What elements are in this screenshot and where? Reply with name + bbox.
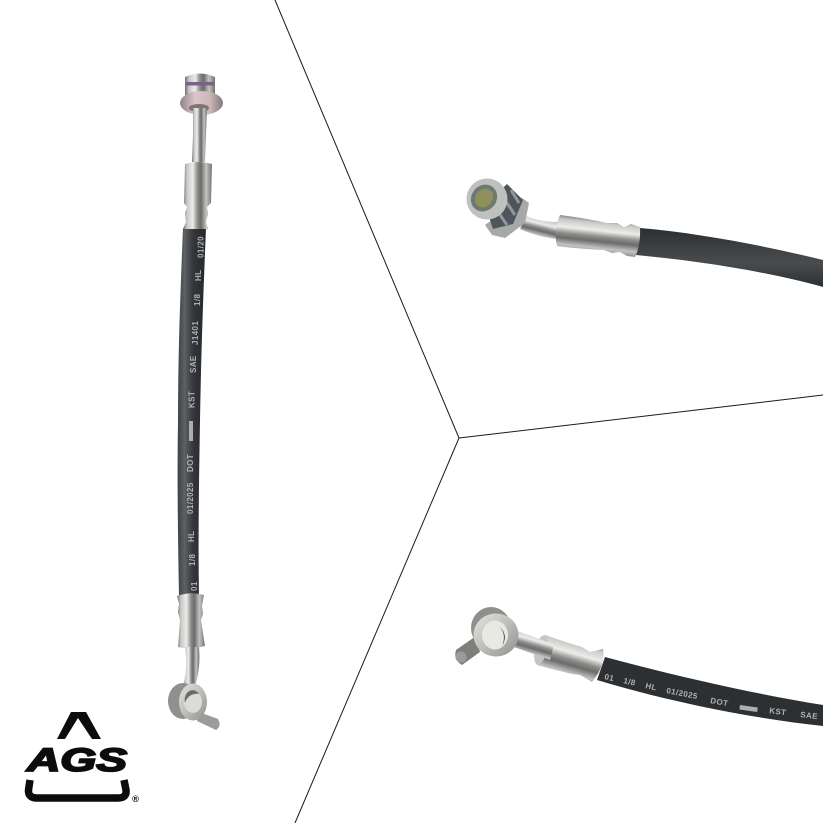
hose printed markings: KST	[769, 706, 787, 717]
bottom bent tube	[183, 647, 199, 689]
banjo eye	[471, 607, 518, 656]
bottom-right view: banjo end close-up with markings	[455, 607, 823, 726]
logo wordmark: AGS	[26, 742, 128, 778]
hose printed markings: DOT	[186, 454, 195, 472]
hose printed markings: 01/2025	[186, 482, 195, 514]
straight tube	[514, 631, 554, 660]
hose printed markings: 01	[604, 672, 615, 683]
hose printed markings: 1/8	[188, 554, 197, 566]
bottom crimp ferrule	[177, 593, 205, 648]
hose body	[178, 228, 206, 597]
hose printed markings: 01/2025	[666, 686, 699, 701]
hose printed markings	[604, 672, 819, 721]
hose printed markings: SAE	[800, 710, 819, 721]
crimp ferrule	[537, 635, 604, 682]
hose printed markings: 01/20	[196, 236, 206, 258]
threaded nut	[465, 178, 529, 238]
hose printed markings: 1/8	[193, 294, 202, 306]
bent tube	[520, 216, 560, 239]
AGS logo	[26, 712, 139, 805]
hose printed markings: SAE	[189, 355, 198, 373]
hose printed markings: J1401	[191, 321, 200, 345]
top banjo bolt fitting	[180, 74, 223, 162]
logo bottom bracket	[28, 780, 126, 798]
bottom stub pin	[197, 712, 220, 730]
top crimp ferrule	[183, 162, 212, 229]
divider lines between the three views	[275, 0, 823, 823]
hose printed markings: HL	[645, 681, 658, 693]
crimp ferrule	[556, 215, 640, 257]
hose body	[597, 657, 823, 726]
hose printed markings: HL	[194, 270, 203, 281]
hose printed markings: DOT	[710, 696, 729, 708]
stub pin	[455, 636, 480, 665]
logo top chevron	[57, 712, 101, 739]
registered mark: ®	[132, 794, 139, 805]
left view: full brake hose, vertical	[168, 74, 223, 730]
hose printed markings: 1/8	[623, 676, 637, 688]
hose printed markings: HL	[187, 531, 196, 542]
hose printed markings: 01	[190, 581, 199, 591]
top-right view: threaded end close-up	[465, 178, 823, 287]
hose body	[636, 228, 823, 287]
hose printed markings: KST	[188, 391, 196, 408]
bottom banjo eye	[168, 683, 207, 720]
hose printed markings	[186, 236, 206, 591]
